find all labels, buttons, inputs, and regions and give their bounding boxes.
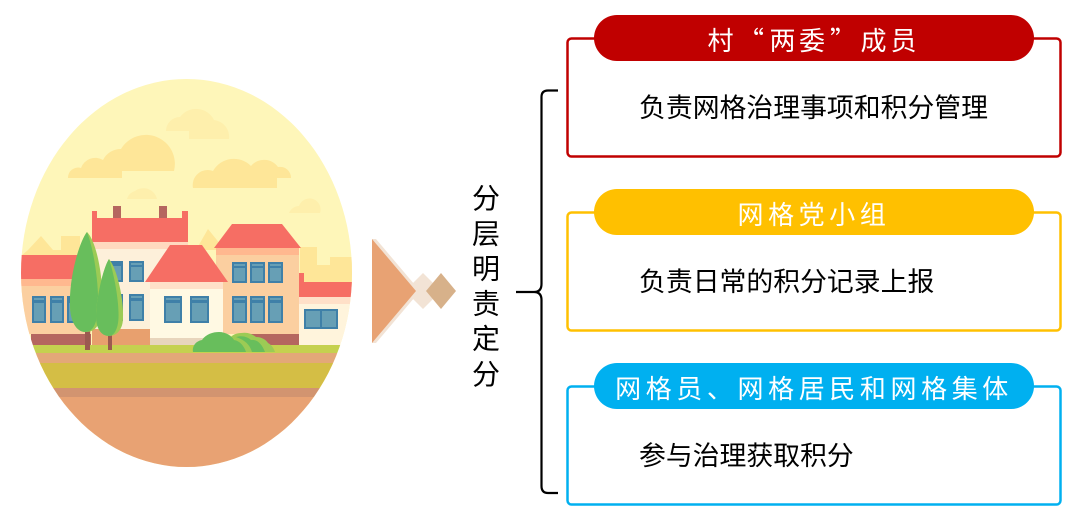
- left building: [21, 255, 91, 345]
- vertical heading: 明: [472, 254, 500, 284]
- vertical heading: 责: [472, 288, 500, 320]
- illustration: village scene in oval: [21, 79, 352, 467]
- vertical heading: 分: [472, 359, 500, 390]
- panel: grid party group: [568, 189, 1060, 330]
- arrow: triangle and diamonds: [372, 239, 456, 343]
- panel: grid party group: 网格党小组: [737, 200, 891, 230]
- back centre building: [92, 206, 188, 345]
- panel: village committee: 负责网格治理事项和积分管理: [639, 93, 988, 123]
- pill heading: [594, 189, 1034, 235]
- front house: [145, 245, 228, 345]
- distant buildings: [21, 229, 352, 290]
- vertical heading: 分: [472, 183, 500, 214]
- panel: village committee: 村“两委”成员: [708, 21, 917, 58]
- vertical heading: 定: [472, 324, 500, 354]
- panel: grid members: 参与治理获取积分: [639, 441, 854, 471]
- ground layers: [21, 345, 352, 467]
- panel: grid members: [568, 363, 1060, 504]
- brace: [516, 90, 558, 493]
- vertical heading: [472, 183, 500, 390]
- bush: [193, 332, 275, 352]
- panel: village committee: [568, 15, 1060, 156]
- right building: [214, 224, 301, 345]
- pill heading: [594, 15, 1034, 61]
- tree: small: [96, 259, 123, 350]
- panel: grid party group: 负责日常的积分记录上报: [639, 267, 934, 297]
- vertical heading: 层: [472, 218, 500, 250]
- panel: grid members: 网格员、网格居民和网格集体: [615, 374, 1013, 404]
- tree: large: [70, 232, 102, 350]
- pill heading: [594, 363, 1034, 409]
- right low building: [299, 273, 352, 345]
- clouds: [68, 109, 321, 213]
